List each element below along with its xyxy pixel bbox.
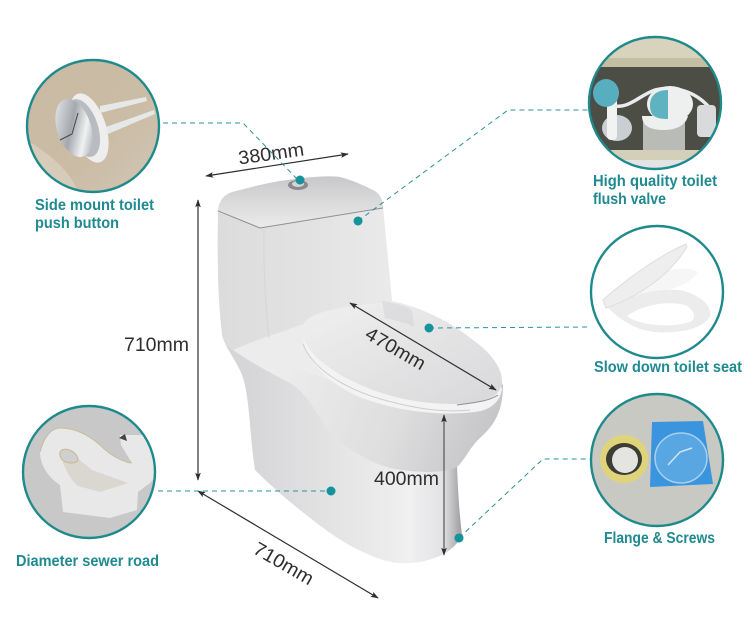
dimension: depth 710mm [198, 491, 378, 598]
callout: push button connector [163, 123, 304, 184]
label: push button: push button [35, 215, 119, 232]
dimension: tank width 380mm [206, 139, 348, 176]
panel: flush valve photo [589, 37, 721, 169]
label: sewer road: Diameter sewer road [16, 553, 159, 570]
dimension: seat height 400mm [374, 415, 444, 555]
flush button on tank lid [288, 180, 308, 190]
callout: flange connector [454, 459, 591, 542]
callout: sewer road connector [158, 486, 336, 496]
label: flange and screws: Flange & Screws [604, 530, 715, 547]
callout: flush valve connector [354, 110, 590, 226]
dimension: seat length 470mm: 470mm [361, 324, 429, 375]
label: push button: Side mount toilet [35, 197, 155, 214]
dimension: seat length 470mm [350, 303, 496, 390]
panel: slow down toilet seat photo [591, 226, 723, 358]
dimension: tank width 380mm: 380mm [237, 139, 305, 169]
toilet seat lid [302, 301, 502, 404]
dimension: seat height 400mm: 400mm [374, 469, 439, 490]
label: flush valve [593, 173, 718, 208]
label: flush valve: High quality toilet [593, 173, 718, 190]
label: push button [35, 197, 155, 232]
toilet illustration [218, 176, 503, 563]
panel: flange and screws photo [591, 394, 723, 526]
label: flush valve: flush valve [593, 191, 666, 208]
panel: sewer road cross-section photo [23, 406, 156, 538]
panel: push button photo [27, 60, 159, 192]
callout: toilet seat connector [424, 324, 590, 332]
dimension: height 710mm: 710mm [124, 335, 189, 356]
dimension: depth 710mm: 710mm [249, 539, 317, 590]
